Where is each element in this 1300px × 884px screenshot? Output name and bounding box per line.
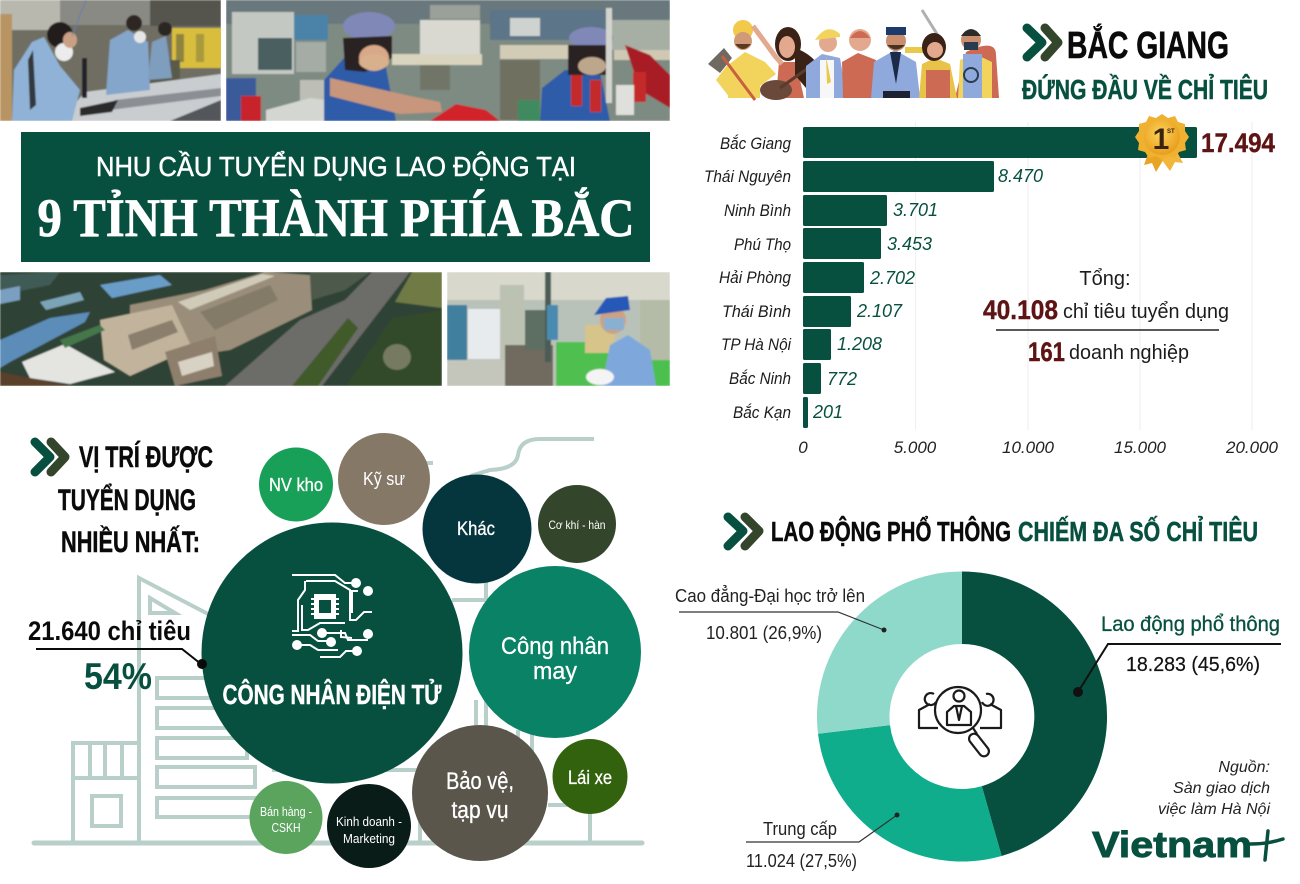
photo: factory worker [447,272,670,386]
source note: Nguồn: [1218,759,1270,776]
callout: 21.640 positions 54%: 54% [84,656,152,697]
icon: first place medal [1135,114,1189,172]
callout: total: Tổng: [1079,268,1131,290]
callout: total: 161 [1028,337,1065,367]
title line 2: 9 TỈNH THÀNH PHÍA BẮC [38,187,634,248]
bar chart: recruitment by province: 5.000 [894,438,937,457]
bubble: Kỹ sư [338,433,430,525]
bubble: Kinh doanh - Marketing: Kinh doanh - [336,815,402,829]
label: Cao đẳng-Đại học [675,585,886,643]
banner: title [21,132,650,262]
bar chart: recruitment by province: TP Hà Nội [721,335,792,354]
heading: most recruited positions: VỊ TRÍ ĐƯỢC [79,440,213,474]
bubble: Kinh doanh - Marketing [327,784,411,868]
bubble label: CÔNG NHÂN ĐIỆN TỬ [222,678,442,710]
illustration: workers group [708,10,999,100]
photo: electronics workers [0,0,222,121]
heading: most recruited positions: TUYỂN DỤNG [58,483,196,517]
source note: việc làm Hà Nội [1158,801,1270,818]
bubble: Khác [422,474,532,584]
background: building outline [34,439,642,843]
callout: total [983,268,1229,367]
bubble: Kinh doanh - Marketing: Marketing [343,832,395,846]
bubble: Lái xe [552,739,628,814]
source note: Sàn giao dịch [1173,780,1270,797]
callout: total: chỉ tiêu tuyển dụng [1063,301,1229,323]
bubble: Khác: Khác [457,519,495,540]
bubble: Cơ khí - hàn: Cơ khí - hàn [548,518,606,532]
bar chart: recruitment by province: 201 [812,402,843,422]
heading: unskilled labour majority [771,515,1258,547]
bar chart: recruitment by province: Bắc Giang [720,134,791,153]
bubble: Công nhân may: Công nhân [501,633,609,660]
bubble: Cơ khí - hàn [538,485,616,563]
icon: first place medal: ST [1167,129,1175,135]
label: Cao đẳng-Đại học: Cao đẳng-Đại học trở lên [675,585,865,606]
bar chart: recruitment by province: 3.701 [893,200,938,220]
bar chart: recruitment by province: 15.000 [1114,438,1167,457]
heading: most recruited positions: NHIỀU NHẤT: [61,525,200,559]
bubble: Kỹ sư: Kỹ sư [363,469,405,489]
heading: unskilled labour majority: LAO ĐỘNG PHỔ THÔNG [771,515,1011,547]
bubble: NV kho: NV kho [269,475,323,495]
source note [1158,759,1270,818]
bar chart: recruitment by province: 2.702 [869,268,915,288]
callout: 21.640 positions 54% [28,616,201,697]
bubble: Bảo vệ, tạp vụ: Bảo vệ, [446,768,514,795]
callout: total: doanh nghiệp [1069,342,1189,364]
bar chart: recruitment by province: 2.107 [856,301,903,321]
bar chart: recruitment by province: Thái Bình [722,302,791,321]
logo: Vietnam+: Vietnam [1092,824,1252,865]
bubble: Bán hàng - CSKH: Bán hàng - [260,805,312,819]
label: Lao động phổ thông: 18.283 (45,6%) [1126,654,1260,676]
bar chart: recruitment by province: 3.453 [887,234,932,254]
photo: garment workers [226,0,670,121]
label: Lao động phổ thông [1073,613,1281,697]
bubble: Bảo vệ, tạp vụ: tạp vụ [452,797,508,824]
bar chart: recruitment by province: 10.000 [1002,438,1055,457]
bubble: Công nhân may [469,566,641,738]
bar chart: recruitment by province: Ninh Bình [724,201,791,220]
heading: Bắc Giang: BẮC GIANG [1067,23,1229,67]
bubble: Lái xe: Lái xe [568,768,612,789]
bar chart: recruitment by province [704,122,1279,457]
label: Trung cấp: Trung cấp [763,819,837,839]
heading: most recruited positions [58,440,213,559]
label: Trung cấp: 11.024 (27,5%) [746,851,857,871]
bar chart: recruitment by province: 17.494 [1201,128,1275,158]
title line 1: NHU CẦU TUYỂN DỤNG LAO ĐỘNG TẠI [96,151,576,182]
label: Trung cấp [746,812,900,871]
bar chart: recruitment by province: 0 [798,438,808,457]
bubble: Bán hàng - CSKH: CSKH [272,821,300,835]
icon: first place medal: 1 [1153,123,1169,156]
icon: magnifier over people [919,687,1001,758]
icon: chevrons positions [35,442,65,472]
bubble: Công nhân may: may [533,658,577,685]
callout: 21.640 positions 54%: 21.640 chỉ tiêu [28,616,191,646]
bar chart: recruitment by province: 772 [827,369,857,389]
bar chart: recruitment by province: Thái Nguyên [704,167,791,186]
bar chart: recruitment by province: 1.208 [837,334,882,354]
label: Lao động phổ thông: Lao động phổ thông [1101,613,1280,636]
bubble: Công nhân điện tử [197,522,462,784]
bar chart: recruitment by province: Bắc Kạn [733,403,791,422]
icon: chevrons Bắc Giang [1027,28,1058,57]
icon: circuit chip [292,575,373,657]
bar chart: recruitment by province: 8.470 [998,166,1043,186]
label: Cao đẳng-Đại học: 10.801 (26,9%) [706,623,822,643]
bar chart: recruitment by province: Hải Phòng [719,268,791,287]
icon: chevrons workforce [728,517,759,546]
callout: total: 40.108 [983,295,1058,325]
donut chart: education level [675,572,1281,871]
bar chart: recruitment by province: Bắc Ninh [729,369,791,388]
bubble: Bảo vệ, tạp vụ [412,725,548,861]
photo: industrial park aerial [0,272,442,386]
bar chart: recruitment by province: Phú Thọ [734,235,791,254]
bubble: Bán hàng - CSKH [250,781,322,854]
bubble: NV kho [259,448,333,522]
bar chart: recruitment by province: 20.000 [1225,438,1279,457]
